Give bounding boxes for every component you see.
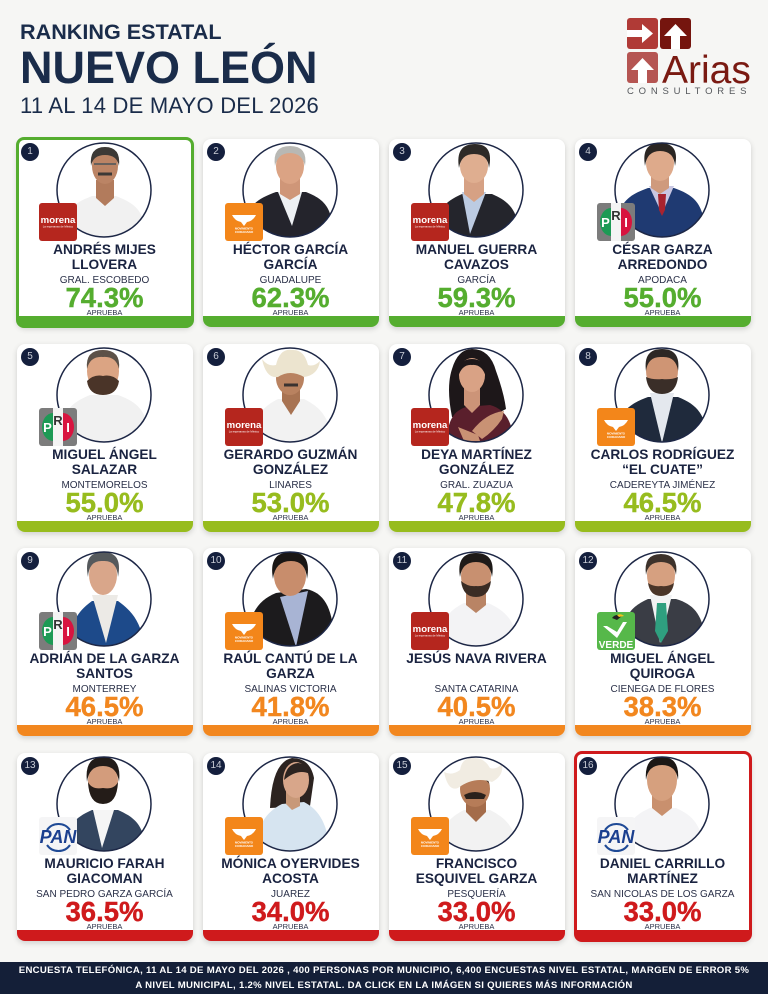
name (53, 242, 156, 272)
approval label: APRUEBA (273, 513, 308, 522)
badge: PRI: R (53, 413, 63, 428)
portrait (614, 347, 710, 443)
approval label: APRUEBA (645, 717, 680, 726)
rank number: 15 (396, 760, 408, 771)
name (221, 856, 360, 886)
municipality: CIENEGA DE FLORES (611, 684, 714, 695)
portrait (56, 551, 152, 647)
colour bar (389, 316, 565, 327)
municipality: SANTA CATARINA (435, 684, 518, 695)
municipality: GARCÍA (457, 275, 496, 286)
approval label: APRUEBA (459, 922, 494, 931)
rank number: 9 (27, 555, 33, 566)
rank number (393, 757, 411, 775)
name: SALAZAR (72, 462, 137, 477)
rank number: 5 (27, 351, 33, 362)
colour bar (17, 724, 193, 736)
approval percentage: 46.5% (624, 487, 701, 518)
logo: Arias Consultores: Arias (662, 49, 751, 92)
badge: PRI: P (43, 420, 52, 435)
badge: PAN (39, 817, 77, 855)
approval label: APRUEBA (459, 717, 494, 726)
card 16: Daniel Carrillo Martínez (575, 753, 751, 941)
approval label: APRUEBA (87, 717, 122, 726)
card 2: Héctor García García (203, 139, 379, 327)
approval percentage: 33.0% (438, 896, 515, 927)
badge: morena: morena (41, 215, 76, 226)
approval percentage: 36.5% (66, 896, 143, 927)
name: ANDRÉS MIJES (53, 242, 156, 257)
colour bar (203, 724, 379, 736)
badge: morena (225, 408, 263, 446)
badge: movimiento ciudadano: MOVIMIENTO (235, 636, 254, 640)
municipality: MONTERREY (73, 684, 136, 695)
rank number: 12 (582, 555, 594, 566)
name: JESÚS NAVA RIVERA (406, 651, 547, 666)
name: CAVAZOS (444, 257, 509, 272)
rank number (393, 143, 411, 161)
name: MAURICIO FARAH (44, 856, 165, 871)
name: MÓNICA OYERVIDES (221, 856, 360, 871)
badge: morena: morena (413, 624, 448, 635)
highlight border (16, 137, 194, 328)
rank number (207, 348, 225, 366)
rank number (207, 757, 225, 775)
name: CARLOS RODRÍGUEZ (591, 447, 734, 462)
colour bar (575, 930, 751, 941)
badge: movimiento ciudadano: CIUDADANO (235, 844, 254, 848)
badge: PRI: R (611, 208, 621, 223)
badge: verde (597, 612, 635, 650)
card 14: Mónica Oyervides Acosta (203, 753, 379, 941)
rank number (579, 757, 597, 775)
card 4: César Garza Arredondo (575, 139, 751, 327)
rank number (579, 143, 597, 161)
rank number: 16 (582, 760, 594, 771)
badge: PRI (39, 408, 77, 446)
rank number (393, 348, 411, 366)
approval percentage: 33.0% (624, 896, 701, 927)
name: GONZÁLEZ (439, 462, 514, 477)
rank number: 13 (24, 760, 36, 771)
municipality: JUAREZ (271, 889, 310, 900)
card 15: Francisco Esquivel Garza (389, 753, 565, 941)
header title block (20, 19, 319, 118)
badge: movimiento ciudadano: CIUDADANO (421, 844, 440, 848)
badge: morena (411, 612, 449, 650)
rank number: 10 (210, 555, 222, 566)
name (421, 446, 532, 477)
badge: movimiento ciudadano (225, 612, 263, 650)
portrait (428, 142, 524, 238)
name: ESQUIVEL GARZA (416, 871, 537, 886)
badge: PRI (597, 203, 635, 241)
name: GARZA (266, 666, 315, 681)
approval percentage: 47.8% (438, 487, 515, 518)
name: “EL CUATE” (622, 462, 703, 477)
rank number: 14 (210, 760, 222, 771)
name: MARTÍNEZ (627, 871, 698, 886)
name: RAÚL CANTÚ DE LA (223, 651, 358, 666)
badge: movimiento ciudadano: MOVIMIENTO (235, 226, 254, 230)
colour bar (17, 316, 193, 327)
portrait (56, 756, 152, 852)
name (44, 856, 165, 886)
badge: morena: morena (227, 420, 262, 431)
badge: morena: La esperanza de México (415, 224, 446, 228)
badge: PAN: PAN (40, 827, 77, 847)
name (52, 446, 157, 477)
card 5: Miguel Ángel Salazar (17, 344, 193, 532)
municipality: GUADALUPE (260, 275, 321, 286)
name: FRANCISCO (436, 856, 517, 871)
name: MIGUEL ÁNGEL (52, 447, 157, 462)
portrait (242, 756, 338, 852)
rank number: 6 (213, 351, 219, 362)
colour bar (203, 316, 379, 327)
rank number: 8 (585, 351, 591, 362)
badge: morena: La esperanza de México (43, 224, 74, 228)
subtitle: dates: 11 AL 14 DE MAYO DEL 2026 (20, 93, 319, 118)
footer: methodology note: A NIVEL MUNICIPAL, 1.2% NIVEL ESTATAL. DA CLICK EN LA IMÁGEN SI QUIERES MÁS INFORMACIÓN (135, 980, 633, 990)
colour bar (575, 316, 751, 327)
badge: PRI: P (43, 624, 52, 639)
name: GIACOMAN (66, 871, 143, 886)
rank number (393, 552, 411, 570)
name: DANIEL CARRILLO (600, 856, 725, 871)
colour bar (389, 724, 565, 736)
badge: PRI (39, 612, 77, 650)
approval percentage: 74.3% (66, 282, 143, 313)
badge: morena: morena (413, 215, 448, 226)
badge: morena: morena (413, 420, 448, 431)
approval percentage: 40.5% (438, 691, 515, 722)
name: LLOVERA (72, 257, 137, 272)
badge: movimiento ciudadano (225, 817, 263, 855)
approval percentage: 53.0% (252, 487, 329, 518)
colour bar (575, 520, 751, 532)
badge: morena: La esperanza de México (229, 430, 260, 434)
name (610, 650, 715, 681)
name (600, 856, 725, 886)
badge: movimiento ciudadano: CIUDADANO (607, 435, 626, 439)
approval percentage: 46.5% (66, 691, 143, 722)
colour bar (203, 930, 379, 941)
logo: Arias Consultores (627, 18, 751, 97)
name (223, 650, 358, 681)
card 7: Deya Martínez González (389, 344, 565, 532)
approval percentage: 34.0% (252, 896, 329, 927)
name: CÉSAR GARZA (612, 242, 713, 257)
name (224, 446, 357, 477)
name: ADRIÁN DE LA GARZA (29, 651, 180, 666)
portrait (614, 551, 710, 647)
colour bar (203, 520, 379, 532)
name (591, 446, 734, 477)
name: MIGUEL ÁNGEL (610, 651, 715, 666)
logo: Arias Consultores: CONSULTORES (627, 86, 751, 97)
colour bar (575, 724, 751, 736)
municipality: APODACA (638, 275, 687, 286)
badge: morena: La esperanza de México (415, 430, 446, 434)
rank number (579, 552, 597, 570)
card 8: Carlos Rodríguez El Cuate (575, 344, 751, 532)
name: ARREDONDO (618, 257, 707, 272)
heading: nuevo león: NUEVO LEÓN (20, 42, 318, 93)
approval percentage: 59.3% (438, 282, 515, 313)
name: QUIROGA (630, 666, 695, 681)
portrait (242, 347, 338, 443)
rank number (579, 348, 597, 366)
municipality: SALINAS VICTORIA (244, 684, 337, 695)
badge: PAN: PAN (598, 827, 635, 847)
footer: methodology note (0, 962, 768, 994)
approval percentage: 62.3% (252, 282, 329, 313)
name (233, 242, 348, 272)
card 3: Manuel Guerra Cavazos (389, 139, 565, 327)
approval label: APRUEBA (459, 308, 494, 317)
name: MANUEL GUERRA (416, 242, 537, 257)
card 9: Adrián de la Garza Santos (17, 548, 193, 736)
approval label: APRUEBA (645, 308, 680, 317)
badge: PRI: I (66, 624, 70, 639)
badge: morena (411, 408, 449, 446)
portrait (428, 551, 524, 647)
approval label: APRUEBA (273, 922, 308, 931)
approval label: APRUEBA (273, 717, 308, 726)
approval percentage: 55.0% (66, 487, 143, 518)
badge: morena (39, 203, 77, 241)
footer: methodology note: ENCUESTA TELEFÓNICA, 11 AL 14 DE MAYO DEL 2026 , 400 PERSONAS POR MUNICIPIO, 6,400 ENCUESTAS NIVEL ESTATAL, MARGEN DE ERROR 5% (19, 965, 749, 976)
badge: PRI: I (624, 215, 628, 230)
badge: PRI: R (53, 617, 63, 632)
municipality: MONTEMORELOS (61, 480, 148, 491)
portrait (242, 551, 338, 647)
colour bar (389, 520, 565, 532)
approval label: APRUEBA (87, 922, 122, 931)
municipality: LINARES (269, 480, 312, 491)
municipality: CADEREYTA JIMÉNEZ (610, 480, 715, 491)
name: HÉCTOR GARCÍA (233, 242, 348, 257)
portrait (242, 142, 338, 238)
badge: movimiento ciudadano (225, 203, 263, 241)
badge: movimiento ciudadano: CIUDADANO (235, 639, 254, 643)
approval label: APRUEBA (273, 308, 308, 317)
card 1: Andrés Mijes Llovera (17, 139, 193, 327)
badge: movimiento ciudadano (597, 408, 635, 446)
badge: morena (411, 203, 449, 241)
municipality: SAN PEDRO GARZA GARCÍA (36, 889, 173, 900)
rank number: 3 (399, 146, 405, 157)
approval percentage: 38.3% (624, 691, 701, 722)
municipality: SAN NICOLAS DE LOS GARZA (591, 889, 734, 900)
municipality: PESQUERÍA (447, 889, 506, 900)
name (416, 856, 537, 886)
approval label: APRUEBA (645, 922, 680, 931)
rank number (21, 143, 39, 161)
approval percentage: 55.0% (624, 282, 701, 313)
approval percentage: 41.8% (252, 691, 329, 722)
approval label: APRUEBA (459, 513, 494, 522)
colour bar (17, 520, 193, 532)
approval label: APRUEBA (645, 513, 680, 522)
rank number: 1 (27, 146, 33, 157)
name: GONZÁLEZ (253, 462, 328, 477)
badge: movimiento ciudadano (411, 817, 449, 855)
name: GERARDO GUZMÁN (224, 447, 357, 462)
heading: ranking estatal: RANKING ESTATAL (20, 19, 222, 44)
badge: movimiento ciudadano: MOVIMIENTO (421, 840, 440, 844)
badge: PAN (597, 817, 635, 855)
card 13: Mauricio Farah Giacoman (17, 753, 193, 941)
municipality: GRAL. ESCOBEDO (60, 275, 149, 286)
rank number: 7 (399, 351, 405, 362)
approval label: APRUEBA (87, 308, 122, 317)
portrait (56, 142, 152, 238)
card 6: Gerardo Guzmán González (203, 344, 379, 532)
badge: morena: La esperanza de México (415, 634, 446, 638)
name: GARCÍA (264, 257, 318, 272)
badge: movimiento ciudadano: MOVIMIENTO (607, 432, 626, 436)
rank number (207, 552, 225, 570)
rank number: 11 (397, 555, 407, 566)
name (416, 242, 537, 272)
portrait (614, 142, 710, 238)
badge: PRI: P (601, 215, 610, 230)
municipality: GRAL. ZUAZUA (440, 480, 513, 491)
name: SANTOS (76, 666, 133, 681)
portrait (56, 347, 152, 443)
highlight border (574, 751, 752, 942)
name (612, 242, 713, 272)
name (29, 650, 180, 681)
badge: PRI: I (66, 420, 70, 435)
card 10: Raúl Cantú de la Garza (203, 548, 379, 736)
rank number (21, 757, 39, 775)
approval label: APRUEBA (87, 513, 122, 522)
name: ACOSTA (262, 871, 319, 886)
portrait (428, 756, 524, 852)
rank number (207, 143, 225, 161)
rank number: 2 (213, 146, 219, 157)
colour bar (17, 930, 193, 941)
rank number (21, 552, 39, 570)
colour bar (389, 930, 565, 941)
badge: movimiento ciudadano: CIUDADANO (235, 230, 254, 234)
card 12: Miguel Ángel Quiroga (575, 548, 751, 736)
rank number: 4 (585, 146, 591, 157)
portrait (428, 347, 524, 443)
name: DEYA MARTÍNEZ (421, 447, 532, 462)
rank number (21, 348, 39, 366)
portrait (614, 756, 710, 852)
badge: movimiento ciudadano: MOVIMIENTO (235, 840, 254, 844)
card 11: Jesús Nava Rivera (389, 548, 565, 736)
